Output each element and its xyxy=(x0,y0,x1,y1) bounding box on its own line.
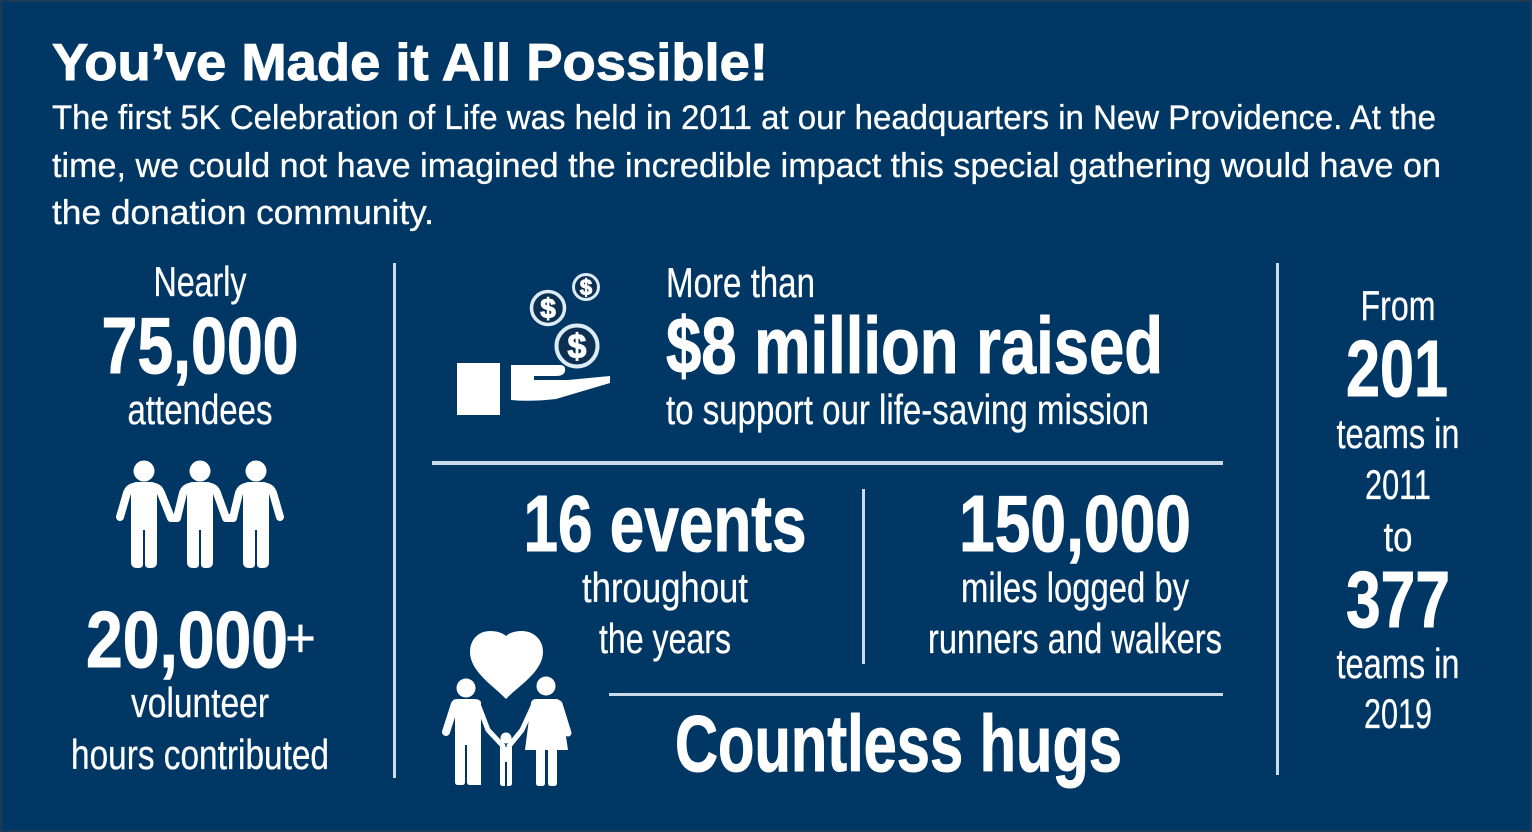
attendees stat: Nearly xyxy=(154,258,246,305)
panel: events stat: the years xyxy=(599,615,731,662)
panel: miles stat: 150,000 xyxy=(959,479,1191,568)
panel: miles stat xyxy=(928,479,1222,662)
panel: team growth: teams in xyxy=(1336,640,1460,687)
divider vertical middle xyxy=(862,489,865,664)
intro paragraph: the donation community. xyxy=(52,194,434,232)
divider left xyxy=(393,263,396,778)
volunteers stat: hours contributed xyxy=(71,731,329,778)
divider right xyxy=(1276,263,1279,775)
icon: hand receiving coins: $ xyxy=(568,328,587,366)
funds raised text: More than xyxy=(666,259,815,306)
panel: funds raised xyxy=(457,259,1163,433)
panel: countless hugs: Countless hugs xyxy=(675,699,1122,788)
panel: team growth: 377 xyxy=(1346,555,1450,644)
intro paragraph xyxy=(52,99,1441,232)
panel: events stat: throughout xyxy=(582,564,748,611)
panel: events stat: 16 events xyxy=(524,479,806,568)
panel: team growth: 201 xyxy=(1346,324,1448,413)
volunteers stat: + xyxy=(285,606,316,669)
panel: team growth: teams in xyxy=(1336,410,1460,457)
intro paragraph: time, we could not have imagined the incredible impact this special gathering would have on xyxy=(52,147,1441,185)
funds raised text: $8 million raised xyxy=(666,301,1163,390)
volunteers stat: 20,000 xyxy=(86,595,288,684)
divider horizontal top xyxy=(432,461,1223,465)
icon: family with heart xyxy=(446,631,568,786)
panel: team growth xyxy=(1336,282,1460,737)
panel: events stat xyxy=(524,479,806,662)
icon: three people holding hands xyxy=(120,460,280,568)
attendees stat xyxy=(102,258,298,433)
title: You’ve Made it All Possible! xyxy=(52,34,768,92)
icon: hand receiving coins: $ xyxy=(540,293,556,324)
panel: team growth: 2019 xyxy=(1364,690,1432,737)
panel: team growth: to xyxy=(1384,513,1412,560)
panel: miles stat: miles logged by xyxy=(961,564,1189,611)
panel: team growth: From xyxy=(1360,282,1436,329)
attendees stat: 75,000 xyxy=(102,301,298,390)
attendees stat: attendees xyxy=(128,386,272,433)
panel: attendees and volunteers xyxy=(71,258,329,778)
funds raised text xyxy=(666,259,1163,433)
intro paragraph: The first 5K Celebration of Life was held in 2011 at our headquarters in New Providence. At the xyxy=(52,99,1436,137)
divider horizontal bottom xyxy=(609,693,1223,696)
funds raised text: to support our life-saving mission xyxy=(666,386,1149,433)
panel: team growth: 2011 xyxy=(1365,461,1431,508)
icon: hand receiving coins xyxy=(457,274,610,415)
icon: hand receiving coins: $ xyxy=(580,275,592,300)
volunteers stat: volunteer xyxy=(131,679,269,726)
panel: miles stat: runners and walkers xyxy=(928,615,1222,662)
volunteers stat xyxy=(71,595,329,778)
